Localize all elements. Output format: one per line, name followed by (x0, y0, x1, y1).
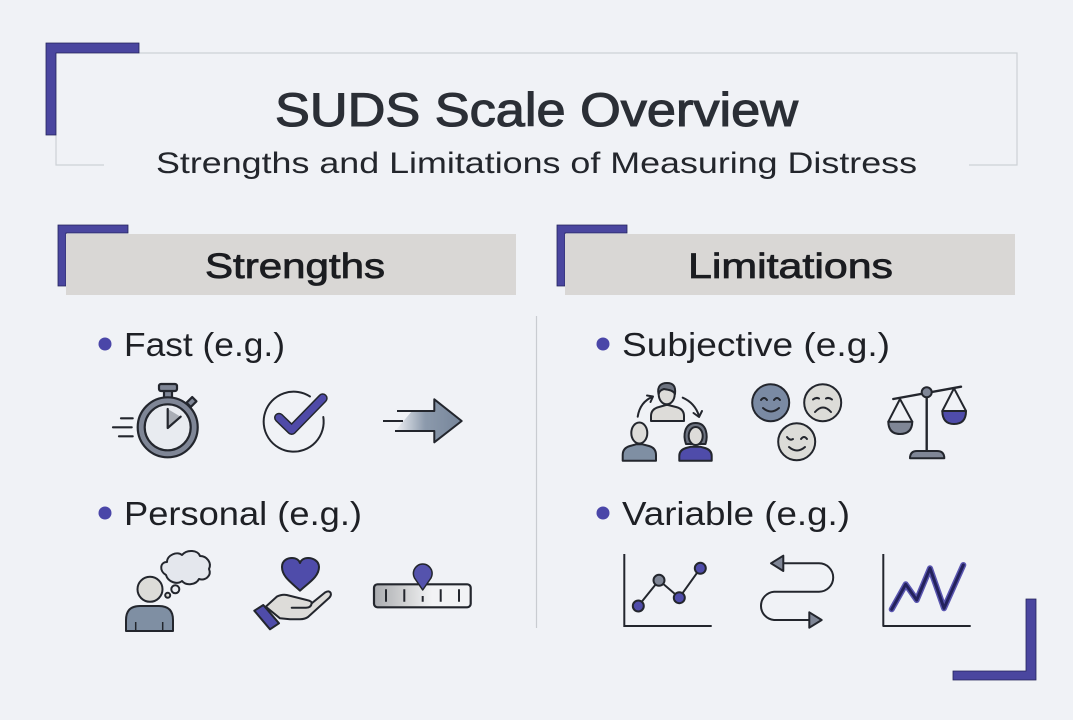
corner bracket: bottom right (953, 599, 1036, 680)
icon: hand holding heart (254, 558, 331, 629)
bullet: personal: Personal (e.g.) (124, 495, 362, 532)
panel header: limitations (557, 225, 1015, 295)
title: SUDS Scale Overview (275, 83, 799, 136)
subtitle: Strengths and Limitations of Measuring Distress (156, 147, 917, 180)
bullet: subjective: Subjective (e.g.) (622, 326, 890, 363)
icon: three faces (752, 384, 841, 460)
icon: check mark (264, 392, 324, 452)
icon: volatile line chart (883, 554, 971, 626)
bullet: fast: Fast (e.g.) (124, 326, 285, 363)
panel header: strengths (58, 225, 516, 295)
icon: rating slider (374, 564, 471, 607)
panel header: limitations: Limitations (688, 247, 893, 286)
icon: stopwatch (113, 384, 198, 457)
icon: three people with arrows (623, 383, 712, 461)
icon: line chart with dots (624, 554, 712, 626)
icon: balance scale (888, 387, 966, 458)
bullet: variable: Variable (e.g.) (622, 495, 850, 532)
icon: back and forth arrows (761, 556, 833, 628)
panel header: strengths: Strengths (205, 247, 385, 286)
icon: person with thought bubble (126, 551, 210, 631)
icon: fast arrow (383, 399, 462, 442)
header frame (46, 43, 1017, 165)
